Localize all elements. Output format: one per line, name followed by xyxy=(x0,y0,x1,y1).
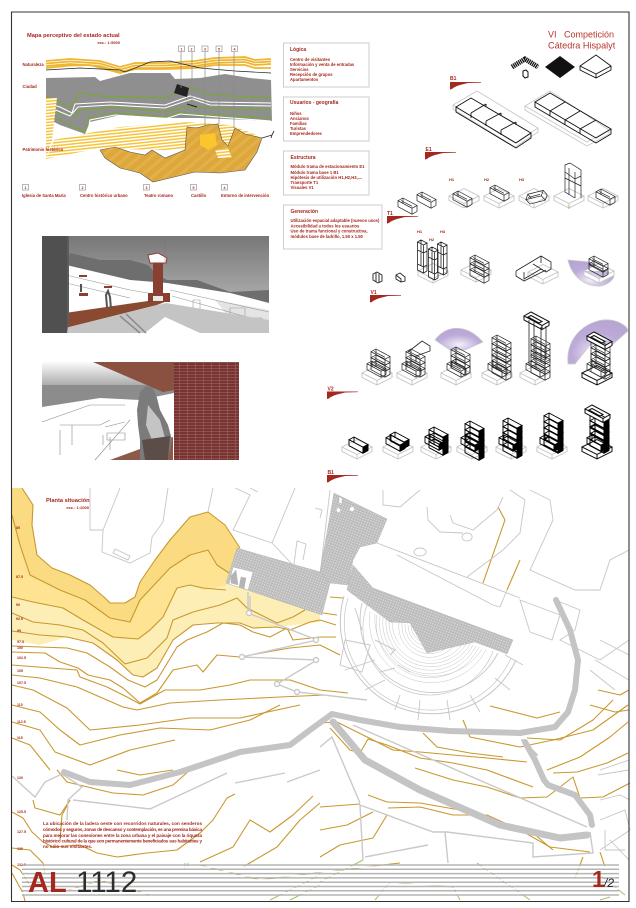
contour elevation labels: 120 xyxy=(17,776,23,780)
perceptive map of current state: 3 xyxy=(204,48,206,52)
paved platforms xyxy=(226,493,513,654)
section label: V2 xyxy=(327,386,358,399)
panel: Usuarios: Ancianos xyxy=(290,116,310,121)
section label: V1 xyxy=(370,290,401,302)
panel: Lógica: Centro de visitantes xyxy=(290,57,331,62)
map title xyxy=(27,33,121,45)
green plan lines bottom xyxy=(185,860,625,900)
perceptive map of current state: 4 xyxy=(234,48,236,52)
contour elevation labels: 85 xyxy=(16,526,20,530)
map legend: Centro histórico urbano xyxy=(80,193,128,198)
layer: heritage stripes xyxy=(46,98,257,159)
E1 row of modules xyxy=(398,163,618,214)
panel: Estructura: Transporte T1 xyxy=(290,180,319,185)
panel: Generación: Utilización espacial adaptable (nuevos usos) xyxy=(290,218,380,223)
contour elevation labels: 87.5 xyxy=(16,575,23,579)
map layer labels xyxy=(22,62,64,152)
map layer labels: Patrimonio histórico xyxy=(22,147,64,152)
plan title xyxy=(46,498,90,510)
T1 transport modules: H2 xyxy=(429,237,435,242)
heading: Competición Cátedra Hispalyt: VI Competición xyxy=(548,30,614,40)
project code AL 1112: 1112 xyxy=(76,866,137,899)
panel: Usuarios xyxy=(284,97,369,141)
render: tower on walkway xyxy=(42,236,269,333)
fan: sight cone large xyxy=(568,320,628,364)
E1 row of modules: H1 xyxy=(449,177,455,182)
heading: Competición Cátedra Hispalyt xyxy=(548,30,616,50)
E1 row of modules: H3 xyxy=(519,177,525,182)
perceptive map of current state: 5 xyxy=(218,48,220,52)
module icons top right xyxy=(512,55,611,78)
contour elevation labels: 132.5 xyxy=(17,863,26,867)
description paragraph xyxy=(43,821,202,849)
description paragraph: no sólo sus visitantes. xyxy=(43,844,92,849)
panel: Generación: Accesibilidad a todos los usuarios xyxy=(290,224,360,228)
heritage terrain xyxy=(100,124,274,182)
T1 transport modules: H1 xyxy=(417,229,423,234)
V1 row of towers xyxy=(362,312,628,385)
panel: Estructura: Módulo trama base 1 B1 xyxy=(290,170,339,175)
render: woman looking over the city xyxy=(42,362,239,460)
section label: B1 xyxy=(450,76,481,90)
contour elevation labels: 125.5 xyxy=(17,810,26,814)
T1 transport modules: H3 xyxy=(440,229,446,234)
contour elevation labels: 107.5 xyxy=(17,681,26,685)
map legend: Castillo xyxy=(191,193,207,198)
city green and white routes xyxy=(46,87,271,135)
sheet number 1/2: /2 xyxy=(603,876,614,890)
description paragraph: para mejorar las conexiones entre la zona urbana y el paisaje con la riqueza xyxy=(43,833,202,838)
footer striped band xyxy=(22,865,619,895)
section label: V1: V1 xyxy=(370,290,377,296)
contour elevation labels xyxy=(16,526,26,867)
description paragraph: La ubicación de la ladera oeste con recorridos naturales, con senderos xyxy=(43,821,202,826)
panel: Usuarios: Niños xyxy=(290,111,302,116)
contour elevation labels: 110 xyxy=(17,703,23,707)
panel: Usuarios: Usuarios - geografía xyxy=(290,100,339,106)
panel: Generación: Uso de trama funcional y constructiva, xyxy=(290,228,368,234)
B1 row of towers xyxy=(342,405,612,460)
section label: T1 xyxy=(387,211,418,224)
panel: Lógica xyxy=(284,43,369,87)
icon: black lattice block xyxy=(545,56,575,78)
panel: Estructura: Visuales V1 xyxy=(290,185,314,190)
plan title: Planta situación xyxy=(46,498,90,504)
map title: esc.: 1:5000 xyxy=(97,40,121,45)
panel: Lógica: Servicios xyxy=(290,67,309,72)
contour elevation labels: 97.5 xyxy=(17,640,24,644)
section label: B1 lower: B1 xyxy=(328,470,334,476)
contour elevation labels: 90 xyxy=(16,603,20,607)
panel: Generación xyxy=(284,205,382,249)
map legend: Entorno de intervención xyxy=(221,193,270,198)
description paragraph: histórico cultural de la que son permanentemente beneficiados sus habitantes y xyxy=(43,838,202,844)
plan title: esc.: 1:2000 xyxy=(66,505,90,510)
T1 transport modules xyxy=(373,229,614,286)
panel: Estructura: Hipótesis de utilización H1,H2,H3,.... xyxy=(290,175,362,180)
icon: L module xyxy=(512,59,538,78)
map legend xyxy=(22,184,270,198)
section label: B1: B1 xyxy=(450,76,457,82)
contour elevation labels: 130 xyxy=(17,847,23,851)
sheet number 1/2 xyxy=(592,866,614,892)
map legend: 1 xyxy=(24,186,26,190)
perceptive map of current state: 2 xyxy=(190,48,192,52)
contour elevation labels: 102.5 xyxy=(17,656,26,660)
contour elevation labels: 127.5 xyxy=(17,830,26,834)
section label: E1: E1 xyxy=(426,147,432,153)
section label: B1 lower xyxy=(327,470,358,482)
contour elevation labels: 100 xyxy=(17,646,23,650)
perceptive map of current state xyxy=(22,33,274,198)
heading: Competición Cátedra Hispalyt: Cátedra Hispalyt xyxy=(548,40,616,50)
E1 row of modules: H2 xyxy=(484,177,490,182)
roman theatre xyxy=(340,596,523,720)
panel: Generación: Generación xyxy=(290,209,318,215)
leader lines and numbered tags xyxy=(178,46,238,128)
fan: sight cone V1 xyxy=(568,260,614,286)
B1 slab strips xyxy=(453,91,611,148)
layer: nature band xyxy=(46,57,271,73)
map legend: 4 xyxy=(224,186,226,190)
icon: solid slab xyxy=(580,55,611,78)
contour elevation labels: 95 xyxy=(17,629,21,633)
panel: Usuarios: Familias xyxy=(290,121,307,126)
panel: Lógica: Lógica xyxy=(290,47,306,53)
panel: Estructura: Módulo trama de estacionamiento E1 xyxy=(290,164,365,169)
map legend: 2 xyxy=(82,186,84,190)
section label: E1 xyxy=(425,147,456,160)
map legend: 5 xyxy=(192,186,194,190)
panel: Lógica: Apartamentos xyxy=(290,77,319,82)
description paragraph: cómodos y seguros, zonas de descanso y contemplación, es una premisa básica xyxy=(43,827,202,832)
project code AL 1112 xyxy=(28,866,137,899)
contour lines xyxy=(12,488,630,901)
contour elevation labels: 115 xyxy=(17,736,23,740)
panel: Lógica: Información y venta de entradas xyxy=(290,62,355,67)
panel: Usuarios: Emprendedores xyxy=(290,131,323,136)
panel: Estructura xyxy=(284,151,369,195)
panel: Estructura: Estructura xyxy=(290,155,316,161)
map title: Mapa perceptivo del estado actual xyxy=(27,33,120,39)
contour elevation labels: 92.5 xyxy=(16,617,23,621)
panel: Lógica: Recepción de grupos xyxy=(290,72,333,77)
panel: Usuarios: Turistas xyxy=(290,126,307,131)
panel: Generación: módulos base de ladrillo, 1.50 x 1.50 xyxy=(290,234,364,239)
perceptive map of current state: 1 xyxy=(180,48,182,52)
map legend: Iglesia de Santa María xyxy=(22,193,66,198)
black site markers xyxy=(174,84,197,107)
fan: sight cone V2 xyxy=(435,328,483,350)
layer: city band xyxy=(46,73,272,134)
site plan: Planta situación xyxy=(12,488,630,901)
contour elevation labels: 105 xyxy=(17,669,23,673)
sheet number 1/2: 1 xyxy=(592,866,605,892)
contour fill: yellow bands xyxy=(12,488,320,677)
section label: V2: V2 xyxy=(328,386,334,392)
contour elevation labels: 112.5 xyxy=(17,720,26,724)
buildings outline xyxy=(90,488,630,860)
project code AL 1112: AL xyxy=(28,867,67,899)
map layer labels: Naturaleza xyxy=(22,62,44,67)
map legend: Teatro romano xyxy=(144,193,173,198)
roads xyxy=(64,600,592,838)
map layer labels: Ciudad xyxy=(22,84,37,89)
pedestrian paths xyxy=(12,592,593,863)
map legend: 3 xyxy=(146,186,148,190)
section label: T1: T1 xyxy=(387,211,393,217)
